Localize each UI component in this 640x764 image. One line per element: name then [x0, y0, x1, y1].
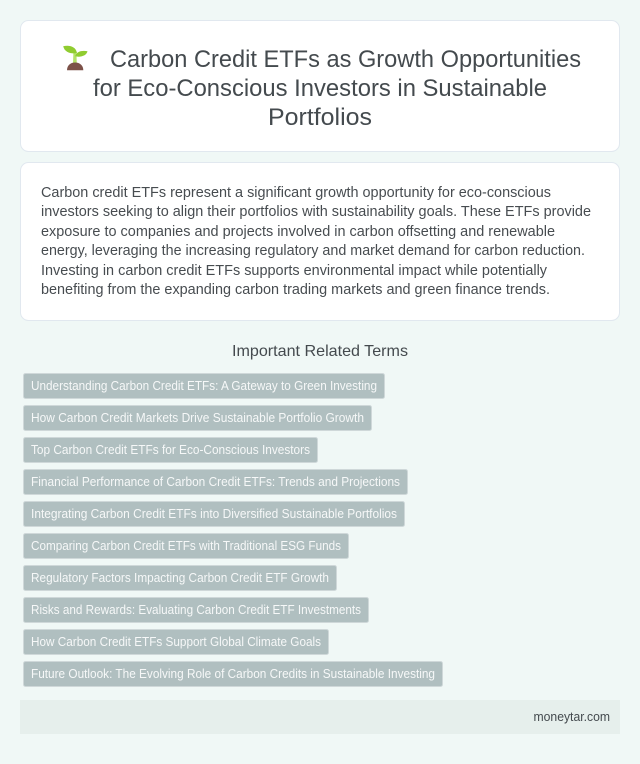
list: related term tags	[24, 374, 442, 686]
tag 4: Financial Performance of Carbon Credit ETFs: Trends and Projections	[31, 474, 400, 489]
tag 5: Integrating Carbon Credit ETFs into Diversified Sustainable Portfolios	[31, 506, 397, 521]
tag 10: Future Outlook: The Evolving Role of Carbon Credits in Sustainable Investing	[31, 666, 435, 681]
heading: title: for Eco-Conscious Investors in Sustainable	[93, 75, 547, 102]
tag 1	[24, 374, 384, 398]
text block: description: energy, leveraging the increasing regulatory and market demand for carbon reduction.	[41, 242, 585, 259]
tag 2: How Carbon Credit Markets Drive Sustainable Portfolio Growth	[31, 410, 364, 425]
text block: description: Carbon credit ETFs represent a significant growth opportunity for eco-conscious	[41, 184, 551, 201]
tag 7	[24, 566, 336, 590]
icon: sprout	[63, 46, 88, 70]
heading: title	[93, 46, 581, 131]
tag 8	[24, 598, 368, 622]
tag 2	[24, 406, 372, 430]
tag 5	[24, 502, 404, 526]
tag 7: Regulatory Factors Impacting Carbon Credit ETF Growth	[31, 570, 329, 585]
heading: title: Portfolios	[268, 104, 372, 131]
tag 6: Comparing Carbon Credit ETFs with Traditional ESG Funds	[31, 538, 341, 553]
text block: description: investors seeking to align their portfolios with sustainability goals. These ETFs provide	[41, 203, 591, 220]
tag 9: How Carbon Credit ETFs Support Global Climate Goals	[31, 634, 321, 649]
tag 3: Top Carbon Credit ETFs for Eco-Conscious Investors	[31, 442, 310, 457]
tag 1: Understanding Carbon Credit ETFs: A Gateway to Green Investing	[31, 378, 377, 393]
text block: description	[41, 184, 591, 298]
panel: description card	[20, 162, 620, 320]
footer	[20, 700, 620, 734]
text block: description: benefiting from the expanding carbon trading markets and green finance trends.	[41, 281, 550, 298]
tag 8: Risks and Rewards: Evaluating Carbon Credit ETF Investments	[31, 602, 361, 617]
tag 10	[24, 662, 442, 686]
heading: important related terms: Important Related Terms	[232, 343, 408, 360]
tag 3	[24, 438, 318, 462]
heading: title: Carbon Credit ETFs as Growth Opportunities	[110, 46, 581, 73]
text block: description: exposure to companies and projects involved in carbon offsetting and renewable	[41, 223, 555, 240]
panel: title card	[20, 20, 620, 152]
tag 4	[24, 470, 408, 494]
footer text: site name: moneytar.com	[534, 709, 610, 724]
tag 9	[24, 630, 328, 654]
text block: description: Investing in carbon credit ETFs supports environmental impact while potentially	[41, 262, 547, 279]
tag 6	[24, 534, 348, 558]
